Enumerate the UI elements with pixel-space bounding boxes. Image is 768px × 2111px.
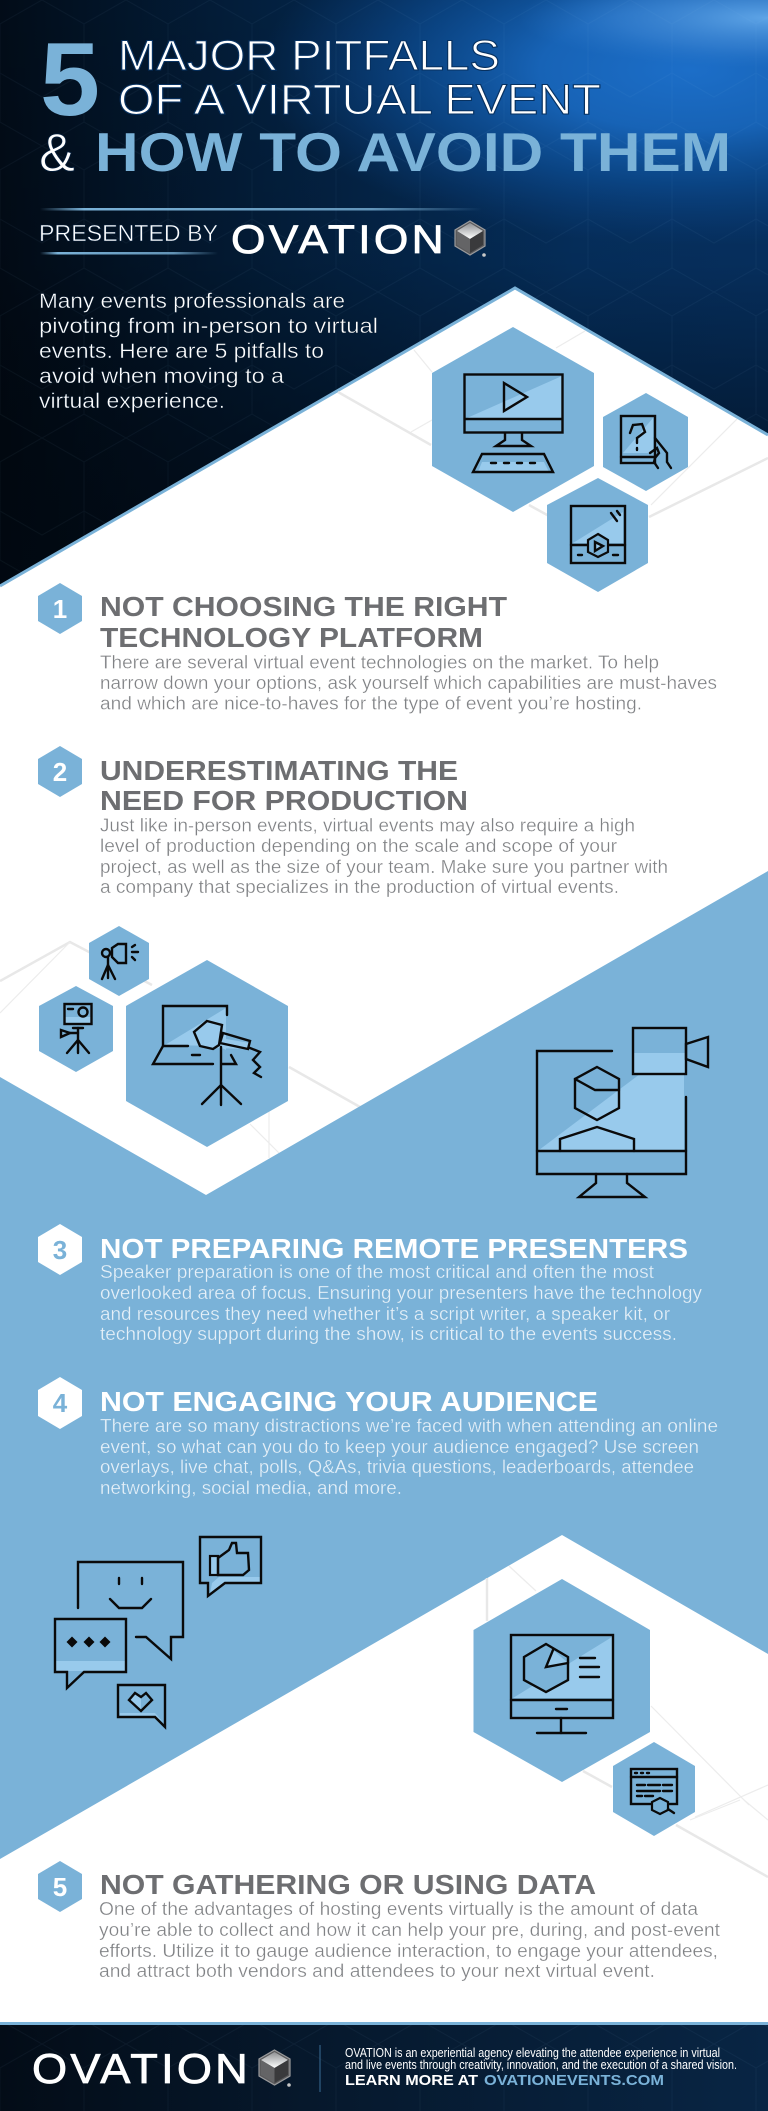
section 4 <box>38 1377 718 1498</box>
icon: laptop with microphone <box>126 960 288 1147</box>
footer call to action <box>345 2072 664 2089</box>
presented by: PRESENTED BY <box>39 220 218 246</box>
heading 1: TECHNOLOGY PLATFORM <box>100 622 483 653</box>
intro text: virtual experience. <box>39 390 225 413</box>
text 2: Just like in-person events, virtual events may also require a high <box>100 816 635 836</box>
icon: browser window with magnifier <box>613 1742 695 1836</box>
icon: smiley speech bubble <box>78 1562 183 1659</box>
heading 5: NOT GATHERING OR USING DATA <box>100 1869 596 1900</box>
text 3: and resources they need whether it’s a script writer, a speaker kit, or <box>100 1304 670 1324</box>
logo: ovation footer: OVATION <box>32 2045 251 2092</box>
heading 4: NOT ENGAGING YOUR AUDIENCE <box>100 1386 598 1417</box>
heading 1: NOT CHOOSING THE RIGHT <box>100 591 507 622</box>
section 1 <box>38 583 717 714</box>
text 5 <box>99 1899 720 1981</box>
number badge 3: 3 <box>53 1235 67 1265</box>
text 4: event, so what can you do to keep your audience engaged? Use screen <box>100 1437 699 1457</box>
text 5: you’re able to collect and how it can help your pre, during, and post-event <box>99 1920 720 1940</box>
heading 1 <box>100 591 507 653</box>
footer call to action: LEARN MORE AT <box>345 2072 478 2089</box>
title line 2: OF A VIRTUAL EVENT <box>118 76 601 124</box>
intro text: Many events professionals are <box>39 290 345 313</box>
section 2 <box>38 746 668 897</box>
text 1: narrow down your options, ask yourself which capabilities are must-haves <box>100 673 717 693</box>
icon: virtual presenter monitor with camera <box>537 1028 708 1197</box>
text 2: project, as well as the size of your team. Make sure you partner with <box>100 857 668 877</box>
logo: ovation header: OVATION <box>231 218 447 262</box>
number badge 4: 4 <box>53 1388 68 1418</box>
text 3: overlooked area of focus. Ensuring your presenters have the technology <box>100 1283 702 1303</box>
text 5: and attract both vendors and attendees to your next virtual event. <box>99 1961 655 1981</box>
icon: heart bubble <box>118 1685 165 1727</box>
intro text: events. Here are 5 pitfalls to <box>39 340 324 363</box>
number badge 1: 1 <box>53 594 67 624</box>
icon: tablet with video <box>547 478 648 592</box>
icon: phone with question mark <box>603 393 688 491</box>
number badge 4 <box>38 1377 82 1429</box>
text 4: overlays, live chat, polls, Q&As, trivia questions, leaderboards, attendee <box>100 1457 694 1477</box>
text 2: level of production depending on the scale and scope of your <box>100 836 617 856</box>
icon: desktop monitor <box>432 327 594 512</box>
icon: logo cube <box>455 221 486 257</box>
text 3: Speaker preparation is one of the most critical and often the most <box>100 1262 654 1282</box>
section 3 <box>38 1224 702 1344</box>
title line 1: MAJOR PITFALLS <box>118 32 500 80</box>
icon: footer logo cube <box>259 2050 291 2087</box>
text 5: One of the advantages of hosting events virtually is the amount of data <box>99 1899 699 1919</box>
ampersand: & <box>39 123 75 183</box>
title <box>39 22 731 183</box>
title line 3: HOW TO AVOID THEM <box>95 122 731 183</box>
presented by rule <box>40 208 482 210</box>
text 2 <box>100 816 668 897</box>
intro text: pivoting from in-person to virtual <box>39 315 378 338</box>
heading 3: NOT PREPARING REMOTE PRESENTERS <box>100 1233 688 1264</box>
text 4 <box>100 1416 718 1498</box>
text 3 <box>100 1262 702 1344</box>
number badge 3 <box>38 1224 82 1275</box>
text 4: networking, social media, and more. <box>100 1478 402 1498</box>
presented by underline <box>40 252 218 254</box>
section 5 <box>38 1861 720 1981</box>
icon: action camera on tripod <box>39 986 113 1072</box>
footer description <box>345 2046 737 2072</box>
number badge 5: 5 <box>53 1872 67 1902</box>
number badge 5 <box>38 1861 82 1912</box>
panel: footer <box>0 2022 768 2111</box>
text 2: a company that specializes in the production of virtual events. <box>100 877 619 897</box>
panel: dark header background <box>0 0 768 586</box>
number badge 2: 2 <box>53 757 67 787</box>
icon: studio light <box>89 926 149 996</box>
number badge 1 <box>38 583 82 634</box>
heading 2: NEED FOR PRODUCTION <box>100 785 468 816</box>
text 5: efforts. Utilize it to gauge audience interaction, to engage your attendees, <box>99 1941 718 1961</box>
title numeral 5: 5 <box>40 22 100 138</box>
text 3: technology support during the show, is critical to the events success. <box>100 1324 677 1344</box>
heading 2: UNDERESTIMATING THE <box>100 755 458 786</box>
heading 2 <box>100 755 468 816</box>
text 4: There are so many distractions we’re faced with when attending an online <box>100 1416 718 1436</box>
icon: typing speech bubble <box>55 1619 126 1688</box>
icon: thumbs up bubble <box>200 1537 261 1596</box>
panel: blue middle section <box>0 871 768 1859</box>
icon group: desktop, phone, tablet <box>432 327 688 592</box>
icon: monitor with pie chart <box>474 1579 650 1782</box>
intro text: avoid when moving to a <box>39 365 284 388</box>
footer call to action: OVATIONEVENTS.COM <box>484 2072 664 2089</box>
number badge 2 <box>38 746 82 797</box>
text 1: There are several virtual event technologies on the market. To help <box>100 652 659 672</box>
text 1: and which are nice-to-haves for the type of event you’re hosting. <box>100 694 642 714</box>
icon group: production <box>39 926 288 1147</box>
icon group: data <box>474 1579 695 1836</box>
intro text <box>39 290 378 413</box>
icon group: chat bubbles <box>55 1537 261 1727</box>
text 1 <box>100 652 717 714</box>
